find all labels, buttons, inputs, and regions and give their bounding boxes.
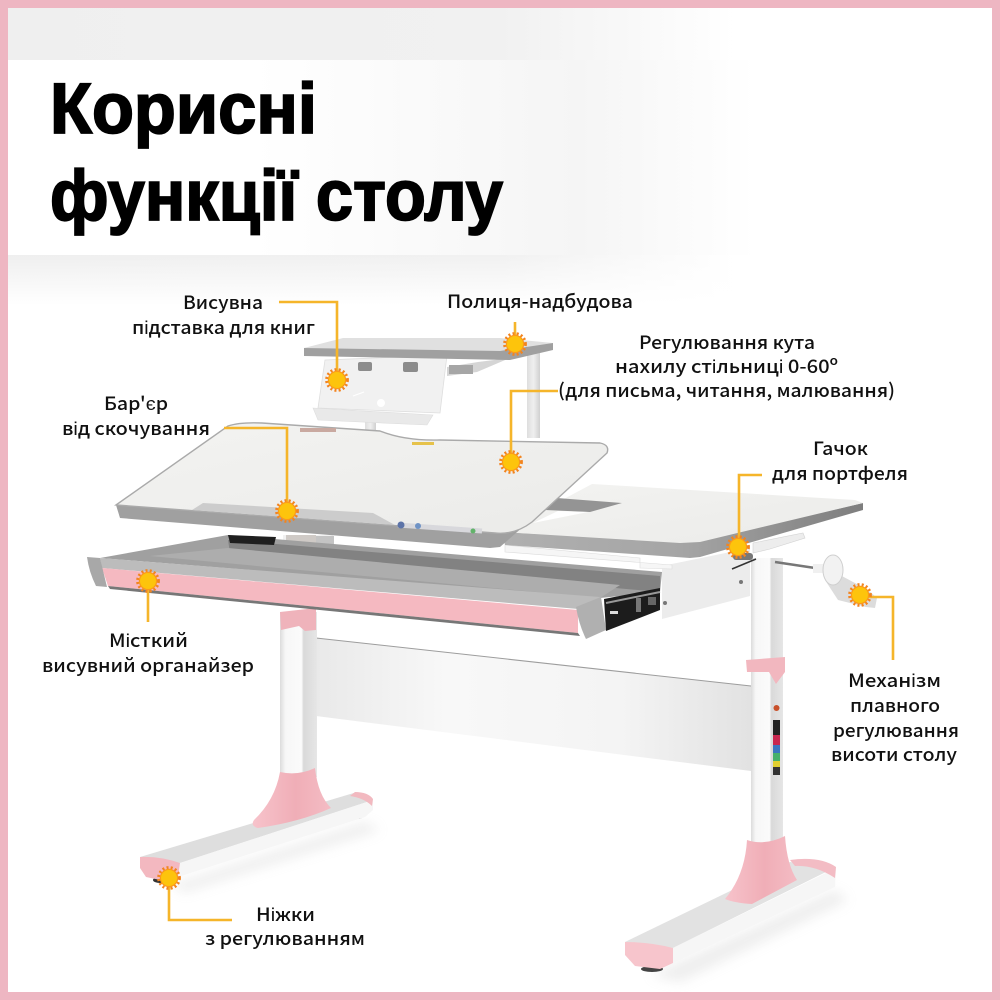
callout: ніжки [159, 868, 365, 951]
callout: кут нахилу: Регулювання кута [639, 329, 815, 355]
callout: кут нахилу: нахилу стільниці 0-60º [615, 353, 838, 379]
callout: бар'єр: Бар'єр [104, 390, 168, 416]
callout: механізм: плавного [850, 692, 940, 718]
callout: книжкова підставка: підставка для книг [132, 314, 315, 340]
callout: гачок: Гачок [813, 435, 868, 461]
callout: механізм: Механізм [848, 667, 941, 693]
callout: книжкова підставка: Висувна [183, 289, 263, 315]
ruler icons [398, 522, 482, 534]
callout: книжкова підставка [132, 289, 347, 390]
desk illustration [87, 338, 877, 982]
title: Корисні [50, 70, 317, 149]
callout: органайзер: Місткий [109, 627, 188, 653]
callout: бар'єр: від скочування [62, 415, 210, 441]
upper shelf [304, 338, 553, 360]
callout: органайзер [42, 571, 254, 678]
callout: полиця [447, 288, 633, 354]
shelf pole [527, 352, 540, 438]
colour label on leg [773, 705, 780, 775]
callout: ніжки: Ніжки [256, 901, 315, 927]
hook mechanism [732, 553, 756, 569]
callout: механізм: регулювання [833, 717, 959, 743]
callout: кут нахилу [501, 329, 895, 472]
callout: полиця: Полиця-надбудова [447, 288, 633, 314]
callout: механізм [831, 585, 959, 767]
callout: гачок [728, 435, 908, 557]
callout: гачок: для портфеля [772, 460, 908, 486]
drawer organiser [87, 535, 662, 639]
title band [8, 60, 992, 255]
grey fade below band [8, 255, 992, 305]
small book stand post [365, 418, 376, 432]
tilted desktop [116, 423, 608, 548]
left leg [140, 608, 373, 883]
support post behind tilt top [283, 535, 334, 547]
right leg [625, 558, 836, 972]
under-desk bracket [505, 533, 805, 619]
anti-roll barrier strip [192, 503, 395, 525]
floor shadows [170, 822, 848, 982]
callout: бар'єр [62, 390, 297, 521]
title [50, 70, 503, 236]
callout: ніжки: з регулюванням [205, 925, 365, 951]
callout: органайзер: висувний органайзер [42, 652, 254, 678]
book stand [313, 355, 510, 425]
callout: механізм: висоти столу [831, 741, 957, 767]
crossbeam [316, 638, 751, 771]
height adjustment crank [775, 555, 877, 608]
title: функції столу [50, 157, 503, 236]
callout: кут нахилу: (для письма, читання, малювання) [558, 377, 895, 403]
top grey strip [8, 8, 992, 60]
drawer runner hardware [604, 588, 660, 631]
right fixed desktop [502, 484, 863, 558]
